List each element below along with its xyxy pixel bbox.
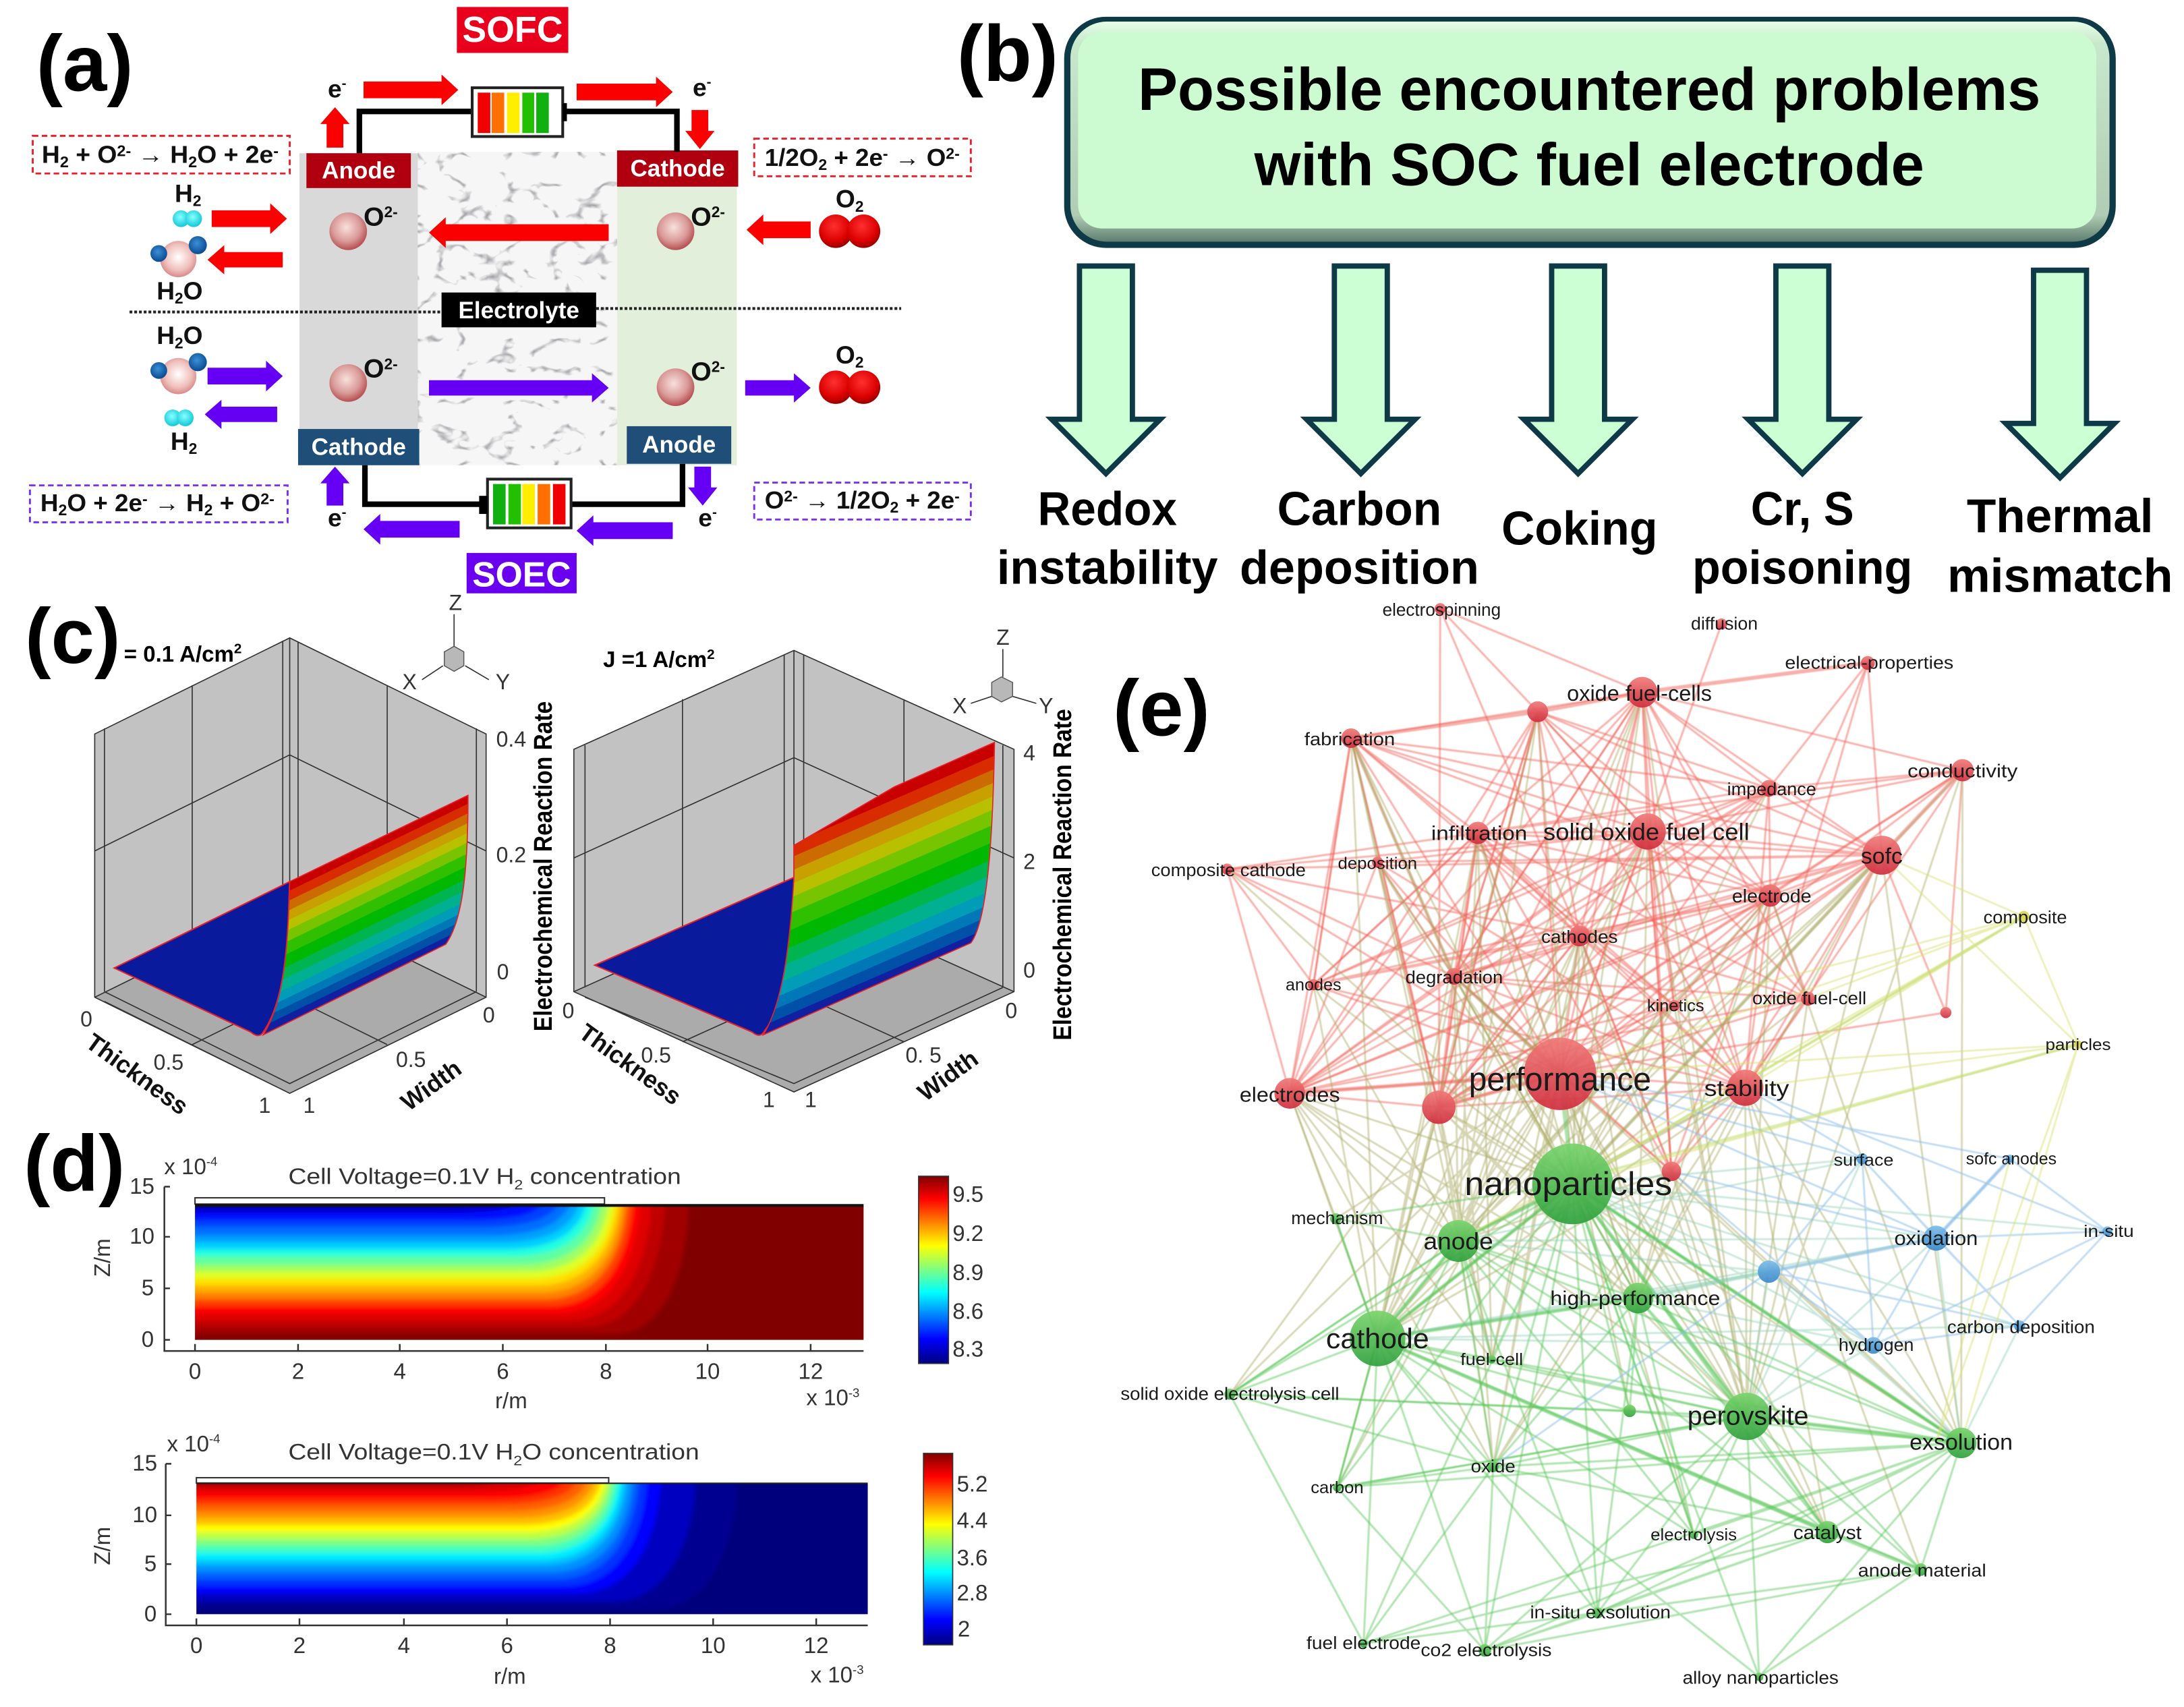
network labels: catalyst: [1793, 1522, 1862, 1544]
heat map: H2 concentration: -4: [206, 1154, 217, 1168]
dotted divider: [130, 308, 901, 312]
3D plot: J = 1 A/cm2: 0: [1023, 958, 1035, 983]
heat map: H2O concentration: 6: [500, 1633, 513, 1658]
O2 molecule top: [819, 185, 880, 248]
reaction: O2 evolution: O: [765, 486, 784, 514]
reaction: O2 reduction: [754, 139, 971, 176]
electron labels: e: [328, 504, 342, 532]
heat map: H2 concentration: -3: [849, 1385, 859, 1399]
heading box: Possible encountered problems: [1138, 56, 2040, 123]
reaction: H2O reduction: 2: [204, 501, 213, 519]
reaction: H2 oxidation: → H: [131, 141, 188, 169]
H2O molecule top: 2: [175, 289, 183, 307]
3D plot: J = 0.1 A/cm2: 2: [234, 641, 241, 657]
network labels: sofc anodes: [1966, 1150, 2057, 1168]
heat map: H2 concentration: 6: [496, 1359, 509, 1384]
reaction: O2 evolution: [754, 483, 971, 519]
battery top: [472, 88, 567, 136]
oxide ions: O: [364, 354, 384, 384]
oxide ions: O: [691, 357, 712, 386]
3D plot: J = 1 A/cm2: 4: [1023, 741, 1035, 765]
heat map: H2 concentration: 12: [798, 1359, 823, 1384]
color bar: H2O: 2.8: [956, 1581, 987, 1606]
H2 molecule top: H: [175, 179, 193, 207]
heat map: H2O concentration: 2: [293, 1633, 306, 1658]
color bar: H2O: 3.6: [956, 1546, 987, 1571]
heat map: H2 concentration: [90, 1154, 892, 1414]
reaction: O2 reduction: 2: [818, 156, 827, 173]
network labels: particles: [2046, 1037, 2111, 1054]
heat map: H2 concentration: 4: [393, 1359, 406, 1384]
reaction: O2 reduction: -: [883, 144, 888, 162]
heat map: H2 concentration: 8: [600, 1359, 612, 1384]
problem: Cr, S poisoning: poisoning: [1692, 540, 1912, 594]
network links: [1227, 608, 2107, 1677]
reaction: O2 evolution: 2: [890, 498, 898, 516]
network labels: in-situ exsolution: [1530, 1604, 1671, 1623]
problem: carbon deposition: [1240, 482, 1479, 594]
oxide ions: O: [691, 202, 712, 232]
reaction: H2O reduction: H: [40, 489, 58, 517]
heat map: H2O concentration: 10: [701, 1633, 726, 1658]
3D plot: J = 0.1 A/cm2: Width: [396, 1054, 467, 1116]
H2 molecule bottom: 2: [189, 440, 197, 457]
oxide ions: [329, 202, 725, 406]
reaction: H2 oxidation: 2: [188, 153, 197, 171]
reaction: O2 reduction: 1/2O: [765, 144, 817, 171]
H2O molecule bottom: O: [183, 321, 203, 349]
heat map: H2O concentration: x 10: [811, 1663, 853, 1688]
heat map: H2O concentration: 15: [132, 1451, 157, 1476]
heat map: H2O concentration: O concentration: [522, 1440, 699, 1465]
3D plot: J = 1 A/cm2: 0.5: [641, 1043, 671, 1068]
arrow: redox instability: [1052, 266, 1160, 473]
network labels: oxide fuel-cells: [1567, 681, 1712, 705]
network labels: carbon: [1311, 1479, 1364, 1497]
color bar: H2O: 5.2: [956, 1472, 987, 1497]
reaction: O2 reduction: 2-: [946, 144, 960, 162]
reaction: H2 oxidation: 2: [60, 153, 69, 171]
3D plot: J = 0.1 A/cm2: Electrochemical Reaction Rate: [529, 701, 558, 1031]
network labels: carbon deposition: [1947, 1318, 2095, 1337]
problem: carbon deposition: deposition: [1240, 540, 1479, 594]
heat map: H2 concentration: 0: [142, 1327, 154, 1352]
purple arrows (SOEC flows): [205, 361, 811, 546]
heat map: H2 concentration: 2: [514, 1178, 523, 1193]
reaction: H2 oxidation: O + 2e: [197, 141, 273, 169]
network labels: oxidation: [1894, 1227, 1978, 1250]
panel (b): problems with SOC fuel electrode: [957, 9, 2173, 602]
cathode label bottom: Cathode: [312, 434, 406, 460]
reaction: H2 oxidation: [33, 136, 290, 173]
3D plot: J = 0.1 A/cm2: 0: [497, 960, 509, 984]
reaction: H2O reduction: + O: [213, 489, 260, 517]
network labels: electrodes: [1240, 1082, 1340, 1106]
electrolyte label: Electrolyte: [459, 297, 579, 324]
heading box: with SOC fuel electrode: [1254, 132, 1924, 198]
O2 molecule bottom: O: [836, 341, 855, 369]
external circuit top: [360, 111, 677, 153]
heat map: H2O concentration: 0: [190, 1633, 202, 1658]
network labels: performance: [1469, 1060, 1651, 1098]
heat map: H2O concentration: Cell Voltage=0.1V H: [288, 1440, 488, 1465]
heat map: H2O concentration: -4: [209, 1431, 221, 1445]
network labels: high-performance: [1550, 1288, 1720, 1310]
network labels: oxide fuel-cell: [1752, 989, 1866, 1008]
electron labels: -: [342, 76, 347, 91]
heat map: H2 concentration: 10: [695, 1359, 720, 1384]
3D plot: J = 1 A/cm2: 0: [1005, 999, 1017, 1023]
network labels: in-situ: [2084, 1223, 2134, 1241]
color bar: H2O: 2: [958, 1617, 970, 1642]
reaction: H2 oxidation: -: [273, 142, 279, 159]
anode label bottom: Anode: [642, 432, 716, 458]
electron labels: [328, 74, 717, 532]
network labels: solid oxide fuel cell: [1543, 819, 1750, 845]
network labels: surface: [1834, 1151, 1893, 1169]
heading box: [1064, 17, 2116, 248]
heat map: H2O concentration: 4: [398, 1633, 410, 1658]
3D plot: J = 1 A/cm2: Z: [996, 625, 1010, 649]
red arrows (SOFC flows): [208, 75, 811, 274]
H2 molecule top: 2: [193, 192, 202, 210]
heat map: H2 concentration: 0: [189, 1359, 201, 1384]
network labels: deposition: [1338, 855, 1417, 873]
problem: redox instability: [997, 482, 1218, 594]
3D plot: J = 1 A/cm2: 2: [707, 647, 715, 662]
color bar: H2: 8.9: [952, 1261, 983, 1285]
network labels: composite cathode: [1151, 861, 1306, 880]
electron labels: -: [707, 74, 712, 90]
battery bottom: [479, 479, 571, 528]
H2O molecule top: H: [156, 277, 175, 305]
3D plot: J = 0.1 A/cm2: 0.5: [154, 1050, 183, 1074]
panel letter d: (d): [24, 1119, 125, 1208]
color bar: H2: 8.3: [952, 1337, 983, 1362]
network labels: diffusion: [1691, 614, 1758, 633]
reaction: O2 reduction: → O: [888, 144, 946, 171]
problem: thermal mismatch: [1947, 489, 2173, 602]
panel (a): SOFC / SOEC schematic: [30, 7, 971, 594]
electrolyte label: [442, 293, 596, 327]
heat map: H2 concentration: Cell Voltage=0.1V H: [288, 1164, 488, 1189]
network labels: fabrication: [1304, 729, 1395, 749]
electron labels: e: [328, 75, 342, 103]
3D plot: J = 1 A/cm2: Thickness: [574, 1018, 687, 1110]
3D plot: J = 1 A/cm2: 0: [563, 999, 574, 1023]
panel (e): keyword co-occurrence network: [1113, 601, 2134, 1688]
3D plot: J = 0.1 A/cm2: [80, 591, 558, 1120]
problem: Cr, S poisoning: [1692, 482, 1912, 594]
anode label top: [306, 153, 411, 188]
reaction: H2O reduction: [30, 486, 287, 522]
arrow: carbon deposition: [1306, 266, 1415, 473]
heat map: H2O concentration: 2: [513, 1453, 522, 1468]
3D plot: J = 1 A/cm2: [563, 625, 1077, 1112]
arrow: Cr, S poisoning: [1748, 266, 1857, 473]
heat map: H2 concentration: x 10: [164, 1155, 206, 1180]
network labels: electrical-properties: [1785, 654, 1953, 672]
oxide ions: 2-: [384, 203, 398, 221]
problem: thermal mismatch: Thermal: [1967, 489, 2154, 542]
reaction: O2 evolution: -: [954, 487, 960, 504]
heat map: H2O concentration: -3: [853, 1662, 864, 1677]
problem: coking: Coking: [1501, 501, 1657, 554]
network labels: sofc: [1861, 844, 1903, 869]
O2 molecule bottom: [819, 341, 880, 404]
network labels: degradation: [1406, 968, 1503, 987]
reaction: O2 evolution: → 1/2O: [798, 486, 890, 514]
3D plot: J = 0.1 A/cm2: 1: [258, 1093, 270, 1118]
reaction: H2O reduction: 2-: [260, 490, 275, 508]
cathode label top: [617, 150, 738, 187]
cathode label bottom: [298, 429, 420, 465]
H2 molecule bottom: [165, 409, 197, 457]
network labels: anodes: [1286, 976, 1342, 994]
panel (d): concentration maps: [24, 1119, 987, 1689]
problem: redox instability: instability: [997, 540, 1218, 594]
reaction: H2 oxidation: 2-: [117, 142, 131, 159]
network labels: composite: [1984, 908, 2067, 927]
heat map: H2 concentration: 5: [142, 1276, 154, 1301]
heat map: H2O concentration: 0: [144, 1602, 156, 1627]
reaction: H2 oxidation: H: [42, 141, 59, 169]
heat map: H2 concentration: r/m: [495, 1389, 527, 1414]
heat map: H2 concentration: 2: [292, 1359, 304, 1384]
heat map: H2O concentration: r/m: [494, 1665, 526, 1689]
heat map: H2O concentration: 5: [144, 1551, 156, 1576]
3D plot: J = 1 A/cm2: J =1 A/cm: [603, 647, 707, 672]
anode label top: Anode: [322, 157, 395, 183]
panel letter c: (c): [25, 592, 120, 680]
electron labels: e: [698, 504, 712, 532]
3D plot: J = 1 A/cm2: 1: [805, 1088, 817, 1112]
cathode label top: Cathode: [630, 155, 725, 181]
heat map: H2O concentration: 8: [604, 1633, 616, 1658]
oxide ions: 2-: [712, 357, 725, 375]
network labels: anode material: [1858, 1562, 1986, 1581]
heat map: H2 concentration: Z/m: [90, 1238, 115, 1277]
heat map: H2O concentration: 12: [804, 1633, 828, 1658]
heat map: H2 concentration: x 10: [806, 1386, 849, 1411]
reaction: H2 oxidation: + O: [69, 141, 117, 169]
network labels: hydrogen: [1839, 1336, 1914, 1355]
problem: carbon deposition: Carbon: [1277, 482, 1441, 536]
external circuit bottom: [365, 464, 683, 504]
panel letter a: (a): [36, 18, 134, 107]
reaction: H2O reduction: → H: [148, 489, 204, 517]
network labels: cathode: [1326, 1323, 1429, 1354]
color bar: H2: [919, 1176, 983, 1364]
SOFC label: SOFC: [462, 9, 563, 50]
H2 molecule top: [173, 179, 202, 227]
O2 molecule top: O: [836, 185, 855, 213]
color bar: H2: 8.6: [952, 1300, 983, 1325]
heat map: H2 concentration: 10: [130, 1224, 154, 1249]
3D plot: J = 1 A/cm2: 0. 5: [905, 1043, 942, 1068]
network labels: nanoparticles: [1464, 1165, 1672, 1203]
network labels: conductivity: [1907, 760, 2017, 781]
electron labels: e: [693, 74, 707, 102]
3D plot: J = 0.1 A/cm2: 0.4: [496, 727, 526, 751]
network labels: infiltration: [1431, 822, 1527, 844]
oxide ions: 2-: [384, 355, 398, 372]
3D plot: J = 0.1 A/cm2: 1: [304, 1093, 315, 1118]
3D plot: J = 1 A/cm2: Width: [913, 1044, 983, 1106]
panel letter e: (e): [1113, 663, 1210, 752]
network labels: alloy nanoparticles: [1683, 1669, 1839, 1688]
3D plot: J = 1 A/cm2: Y: [1039, 693, 1054, 718]
oxide ions: O: [364, 202, 384, 232]
network labels: co2 electrolysis: [1420, 1641, 1551, 1660]
3D plot: J = 0.1 A/cm2: Y: [496, 670, 510, 694]
color bar: H2O: 4.4: [956, 1508, 987, 1533]
heat map: H2 concentration: concentration: [523, 1164, 681, 1189]
network labels: oxide: [1471, 1457, 1516, 1476]
anode label bottom: [627, 426, 731, 464]
arrow: thermal mismatch: [2006, 270, 2115, 478]
network labels: fuel electrode: [1306, 1634, 1420, 1653]
network labels: electrolysis: [1650, 1526, 1737, 1544]
3D plot: J = 1 A/cm2: 2: [1023, 850, 1035, 874]
3D plot: J = 0.1 A/cm2: 0: [483, 1003, 495, 1027]
network labels: perovskite: [1688, 1401, 1808, 1431]
color bar: H2: 9.5: [952, 1182, 983, 1207]
panel letter b: (b): [957, 9, 1058, 98]
network labels: [1120, 601, 2134, 1688]
arrow: coking: [1524, 266, 1632, 473]
network labels: fuel-cell: [1460, 1351, 1523, 1369]
electron labels: -: [342, 504, 347, 520]
network labels: mechanism: [1291, 1209, 1383, 1228]
problem: thermal mismatch: mismatch: [1947, 549, 2173, 602]
3D plot: J = 1 A/cm2: X: [952, 693, 967, 718]
network labels: impedance: [1727, 780, 1816, 799]
reaction: O2 reduction: + 2e: [827, 144, 883, 171]
network labels: exsolution: [1909, 1430, 2013, 1455]
network labels: solid oxide electrolysis cell: [1120, 1385, 1340, 1404]
oxide ions: 2-: [712, 203, 725, 221]
color bar: H2O: [923, 1453, 987, 1645]
heat map: H2O concentration: Z/m: [90, 1527, 115, 1565]
network labels: anode: [1423, 1228, 1493, 1254]
network nodes: [1222, 603, 2113, 1681]
network labels: electrode: [1732, 886, 1812, 906]
color bar: H2: 9.2: [952, 1221, 983, 1246]
problem: Cr, S poisoning: Cr, S: [1751, 482, 1854, 536]
network labels: stability: [1704, 1076, 1789, 1101]
H2O molecule bottom: [150, 321, 207, 394]
reaction: O2 evolution: 2-: [784, 487, 798, 504]
H2 molecule bottom: H: [171, 427, 189, 455]
heat map: H2 concentration: 15: [130, 1174, 154, 1199]
3D plot: J = 0.1 A/cm2: X: [402, 670, 417, 694]
network labels: kinetics: [1647, 997, 1704, 1015]
3D plot: J = 1 A/cm2: Electrochemical Reaction Rate: [1048, 709, 1077, 1041]
electron labels: -: [712, 504, 717, 520]
reaction: H2O reduction: O + 2e: [67, 489, 142, 517]
reaction: O2 evolution: + 2e: [898, 486, 954, 514]
3D plot: J = 0.1 A/cm2: Z: [449, 591, 462, 615]
O2 molecule bottom: 2: [855, 353, 863, 371]
H2O molecule top: [150, 236, 207, 307]
problem: redox instability: Redox: [1037, 482, 1177, 536]
3D plot: J = 0.1 A/cm2: 0: [80, 1007, 92, 1031]
3D plot: J = 1 A/cm2: 1: [763, 1088, 775, 1112]
heat map: H2O concentration: [90, 1431, 892, 1689]
H2O molecule top: O: [183, 277, 203, 305]
O2 molecule top: 2: [855, 198, 863, 215]
panel (c): 3D electrochemical reaction rate plots: [25, 591, 1077, 1120]
heat map: H2O concentration: x 10: [167, 1432, 209, 1457]
reaction: H2O reduction: -: [142, 490, 148, 508]
reaction: H2O reduction: 2: [58, 501, 67, 519]
heat map: H2O concentration: 10: [132, 1503, 157, 1528]
3D plot: J = 0.1 A/cm2: 0.5: [396, 1047, 426, 1072]
SOEC label: SOEC: [472, 554, 571, 594]
3D plot: J = 0.1 A/cm2: 0.2: [496, 842, 526, 867]
3D plot: J = 0.1 A/cm2: Thickness: [81, 1028, 194, 1120]
3D plot: J = 0.1 A/cm2: = 0.1 A/cm: [124, 642, 234, 667]
network labels: cathodes: [1541, 928, 1618, 947]
network labels: electrospinning: [1383, 601, 1501, 620]
electrode and electrolyte stack: [299, 150, 737, 465]
H2O molecule bottom: 2: [175, 334, 183, 351]
H2O molecule bottom: H: [156, 321, 175, 349]
